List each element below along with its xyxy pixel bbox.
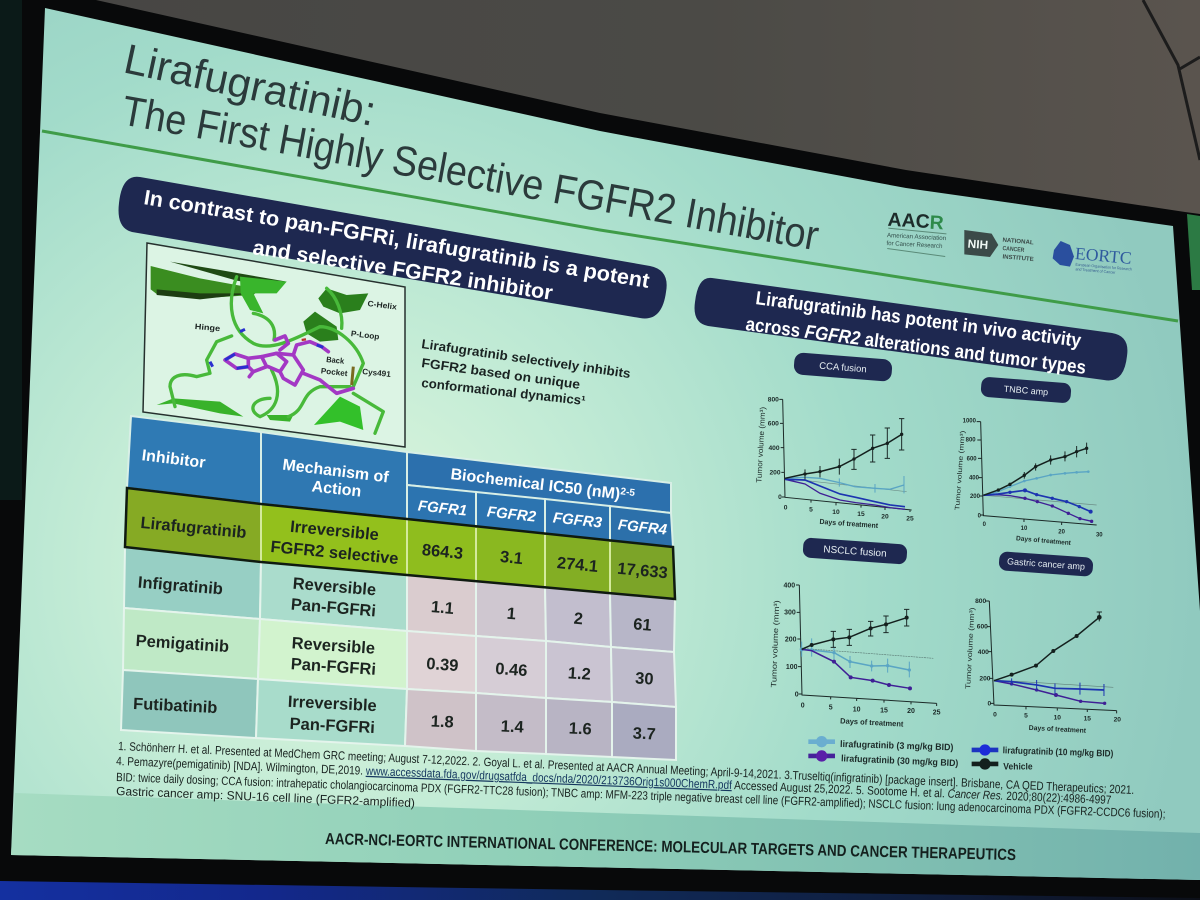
heading pill: left: [119, 177, 667, 318]
line chart: CCA fusion: 0: [784, 504, 788, 511]
chart legend: lirafugratinib (30 mg/kg BID): [841, 753, 959, 768]
title: [118, 35, 822, 259]
line chart: NSCLC fusion: Days of treatment: [840, 716, 904, 729]
line chart: NSCLC fusion: 100: [786, 664, 798, 671]
residue labels: [194, 299, 398, 379]
line chart: TNBC amp: 400: [969, 476, 980, 482]
logo: AACR: R: [929, 213, 944, 234]
line chart: CCA fusion: 5: [809, 507, 813, 514]
table row text: [133, 514, 668, 744]
table header cells: [127, 416, 673, 547]
line chart: NSCLC fusion: 5: [829, 704, 833, 711]
line chart: Gastric cancer amp: [965, 598, 1121, 735]
line chart: NSCLC fusion: 25: [933, 709, 941, 716]
table header text: Biochemical IC50 (nM): [450, 466, 621, 503]
table row text: Reversible: [291, 634, 376, 658]
table header text: Mechanism of: [282, 457, 390, 487]
logo: AACR: [886, 210, 948, 257]
table row text: 3.1: [499, 548, 524, 568]
residue labels: Pocket: [320, 366, 348, 378]
table row text: 3.7: [632, 724, 656, 744]
line chart: Gastric cancer amp: 15: [1084, 716, 1091, 723]
line chart: Gastric cancer amp: 20: [1114, 717, 1121, 724]
line chart: Gastric cancer amp: 10: [1054, 715, 1061, 722]
table header text: FGFR3: [552, 510, 603, 532]
table header text: FGFR4: [617, 517, 668, 539]
chart legend: [808, 736, 1113, 771]
line chart: NSCLC fusion: 10: [853, 707, 861, 714]
table row text: 1.8: [430, 712, 454, 732]
heading pill: right: across FGFR2 alterations and tumor types: [744, 314, 1087, 379]
line chart: TNBC amp: 30: [1096, 533, 1103, 539]
line chart: TNBC amp: 0: [983, 522, 987, 528]
line chart: CCA fusion: 400: [768, 445, 780, 452]
conference footer text: AACR-NCI-EORTC INTERNATIONAL CONFERENCE: MOLECULAR TARGETS AND CANCER THERAPEUTICS: [325, 831, 1016, 864]
logo: AACR: for Cancer Research: [886, 240, 943, 250]
description text: [421, 336, 632, 408]
line chart: CCA fusion: 0: [778, 494, 782, 501]
line chart: TNBC amp: 600: [967, 456, 977, 462]
line chart: CCA fusion: 15: [857, 511, 865, 518]
description text: FGFR2 based on unique: [421, 355, 581, 392]
line chart: CCA fusion: Tumor volume (mm³): [754, 406, 767, 483]
chart label: CCA fusion: [793, 352, 893, 382]
table row text: 61: [633, 615, 652, 635]
table row text: Irreversible: [287, 693, 377, 715]
description text: conformational dynamics¹: [421, 375, 586, 408]
inhibitor table: [121, 416, 676, 760]
heading pill: right: [695, 278, 1127, 380]
highlighted row: lirafugratinib: [125, 488, 675, 599]
chart label: CCA fusion: CCA fusion: [819, 361, 867, 375]
table row text: Pan-FGFRi: [289, 715, 375, 737]
line chart: Gastric cancer amp: 5: [1024, 713, 1028, 720]
line chart: TNBC amp: [954, 419, 1103, 547]
line chart: CCA fusion: 200: [769, 469, 781, 476]
line chart: TNBC amp: 1000: [963, 419, 977, 425]
line chart: TNBC amp: 800: [966, 438, 976, 444]
logo: NIH National Cancer Institute: INSTITUTE: [1002, 254, 1034, 263]
line chart: TNBC amp: Days of treatment: [1016, 535, 1072, 547]
ribbons: [151, 266, 260, 298]
logo: NIH National Cancer Institute: [964, 230, 1034, 263]
logos: [886, 210, 1132, 275]
residue labels: Cys491: [362, 367, 392, 379]
line chart: NSCLC fusion: 20: [907, 708, 915, 715]
chart legend: Vehicle: [1003, 761, 1033, 771]
line chart: Gastric cancer amp: Tumor volume (mm³): [965, 607, 976, 689]
table header text: Inhibitor: [141, 447, 206, 472]
line chart: CCA fusion: 10: [832, 509, 840, 516]
heading pill: right: Lirafugratinib has potent in vivo activity: [754, 288, 1083, 352]
line chart: NSCLC fusion: 0: [795, 691, 799, 698]
footnotes: Gastric cancer amp: SNU-16 cell line (FGFR2-amplified): [116, 784, 415, 810]
description text: Lirafugratinib selectively inhibits: [421, 336, 632, 381]
logo: NIH National Cancer Institute: NIH: [967, 237, 989, 252]
line chart: NSCLC fusion: 200: [785, 637, 797, 644]
table row text: Pan-FGFRi: [290, 655, 376, 679]
residue labels: Back: [326, 355, 345, 366]
table row text: Infigratinib: [137, 574, 224, 598]
table row text: 1: [506, 605, 517, 623]
logo: NIH National Cancer Institute: NATIONAL: [1002, 238, 1034, 246]
chart label: NSCLC fusion: [802, 537, 908, 565]
logo: EORTC: EORTC: [1074, 244, 1132, 268]
table row text: 864.3: [421, 541, 464, 563]
table row text: 1.1: [430, 598, 455, 618]
table row text: Irreversible: [289, 518, 380, 544]
line chart: Gastric cancer amp: 800: [975, 598, 986, 605]
chart legend: lirafugratinib (3 mg/kg BID): [840, 739, 953, 752]
logo: AACR: AAC: [887, 210, 930, 233]
residue labels: P-Loop: [350, 329, 380, 341]
chart label: Gastric cancer amp: [998, 551, 1094, 577]
chart label: TNBC amp: [980, 377, 1072, 403]
logo: EORTC: and Treatment of Cancer: [1075, 266, 1116, 275]
title divider line: [42, 131, 1178, 321]
table body cells: [121, 547, 676, 760]
table row text: Lirafugratinib: [140, 514, 247, 542]
table row text: 30: [635, 669, 654, 689]
line chart: Gastric cancer amp: 0: [987, 701, 991, 708]
table row text: 2: [573, 610, 584, 628]
line chart: NSCLC fusion: 300: [784, 610, 796, 617]
residue labels: Hinge: [194, 322, 221, 333]
table row text: 1.6: [568, 719, 592, 739]
table row text: 1.2: [567, 664, 591, 684]
line chart: CCA fusion: 20: [881, 513, 889, 520]
chart label: NSCLC fusion: NSCLC fusion: [823, 544, 887, 560]
heading pill: left: In contrast to pan-FGFRi, lirafugratinib is a potent: [142, 186, 651, 293]
table row text: FGFR2 selective: [270, 538, 399, 568]
table row text: Pan-FGFRi: [290, 596, 377, 620]
line chart: CCA fusion: [754, 397, 914, 530]
chart legend: lirafugratinib (10 mg/kg BID): [1003, 745, 1113, 759]
table row text: 0.39: [426, 655, 459, 675]
chart label: Gastric cancer amp: Gastric cancer amp: [1007, 556, 1085, 572]
title: The First Highly Selective FGFR2 Inhibitor: [118, 87, 822, 259]
line chart: Gastric cancer amp: 0: [993, 711, 997, 718]
footer band: [11, 793, 1200, 880]
line chart: TNBC amp: 20: [1058, 529, 1066, 535]
table row text: 274.1: [556, 554, 599, 576]
line chart: TNBC amp: 10: [1021, 526, 1028, 532]
line chart: Gastric cancer amp: 400: [978, 649, 989, 656]
table row text: 0.46: [495, 660, 528, 680]
table row text: 1.4: [500, 717, 525, 737]
heading pill: left: and selective FGFR2 inhibitor: [251, 236, 554, 305]
line chart: Gastric cancer amp: 200: [979, 675, 991, 682]
footnotes: 4. Pemazyre(pemigatinib) [NDA]. Wilmington, DE,2019. www.accessdata.fda.gov/drugsatfda_docs/nda/2020/213736Orig1s000ChemR.pdf Accessed August 25,2022. 5. Sootome H. et al. Cancer Res. 2020;80(22):4986-4997: [116, 754, 1112, 807]
table header text: FGFR1: [417, 498, 468, 520]
line chart: TNBC amp: 200: [970, 494, 981, 500]
line chart: Gastric cancer amp: Days of treatment: [1029, 725, 1087, 735]
table row text: 17,633: [616, 560, 668, 582]
line chart: CCA fusion: 600: [768, 421, 779, 428]
line chart: CCA fusion: 800: [768, 397, 779, 404]
line chart: Gastric cancer amp: 600: [977, 624, 988, 631]
logo: NIH National Cancer Institute: CANCER: [1002, 246, 1025, 254]
residue labels: C-Helix: [367, 299, 398, 312]
table header text: [141, 447, 668, 539]
table row text: Pemigatinib: [135, 632, 230, 656]
ligand: [225, 336, 353, 393]
logo: AACR: American Association: [887, 232, 947, 242]
protein structure figure: [143, 243, 405, 447]
table header text: 2-5: [620, 486, 636, 499]
table row text: Reversible: [292, 575, 377, 599]
table header text: Action: [311, 478, 362, 501]
line chart: TNBC amp: Tumor volume (mm³): [954, 430, 967, 511]
logo: EORTC: [1053, 241, 1132, 275]
line chart: NSCLC fusion: 0: [801, 703, 805, 710]
line chart: CCA fusion: 25: [906, 515, 914, 522]
chart label: TNBC amp: TNBC amp: [1003, 384, 1049, 397]
title: Lirafugratinib:: [120, 35, 380, 135]
table row text: Futibatinib: [133, 695, 218, 717]
line chart: NSCLC fusion: 400: [784, 583, 795, 590]
line chart: TNBC amp: 0: [978, 513, 982, 519]
line chart: NSCLC fusion: [769, 583, 941, 729]
logo: EORTC: European Organisation for Research: [1075, 262, 1132, 272]
table header text: FGFR2: [486, 504, 537, 526]
line chart: CCA fusion: Days of treatment: [819, 517, 879, 530]
line chart: NSCLC fusion: Tumor volume (mm³): [769, 600, 781, 688]
line chart: NSCLC fusion: 15: [880, 708, 888, 715]
